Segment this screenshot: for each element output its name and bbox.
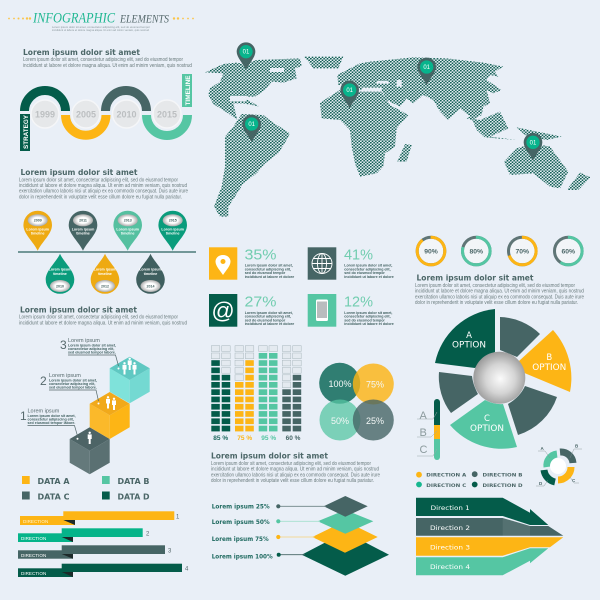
callout 2: sed eiusmod tempor labore. (49, 386, 97, 390)
map pin: australia: 01 (530, 140, 537, 146)
layer 100%: Lorem ipsum 100% (212, 552, 273, 560)
text block: pins intro: exercitation ullamco laboris nisi ut aliquip ex ea commodo consequat. Duis aute irure (19, 189, 188, 195)
pin 2013: 2013 (124, 218, 132, 222)
snake timeline (20, 74, 192, 151)
icon: at sign: @ (211, 298, 235, 324)
pin 2011 (69, 211, 97, 251)
stat tile 12% (308, 294, 394, 327)
stat tile 41%: sed do eiusmod tempor (344, 271, 385, 275)
pin 2013: timeline (121, 232, 134, 236)
legend: data: DATA A (38, 477, 70, 486)
venn circles (319, 363, 394, 440)
pin 2009 (23, 211, 52, 251)
donut 60%: 60% (561, 248, 575, 256)
ribbon bars (18, 511, 189, 577)
text block: pie intro: Lorem ipsum dolor sit amet (416, 274, 534, 282)
snake timeline: 2015 (157, 110, 177, 120)
map pin: australia (524, 133, 542, 161)
text block: layers intro: incididunt ut labore et dolore magna aliqua. Ut enim ad minim veniam, quis nostrud (211, 467, 379, 473)
text block: pins intro: incididunt ut labore et dolore magna aliqua. Ut enim ad minim veniam, quis nostrud (19, 183, 187, 189)
stat tile 12%: 12% (344, 294, 373, 311)
small segmented donut: B (575, 444, 579, 448)
legend: data: DATA D (118, 492, 150, 502)
venn circles: 100% (328, 379, 352, 389)
segment: C option: C (484, 414, 490, 424)
segment: A option (435, 309, 495, 368)
small segmented donut: A (540, 446, 544, 451)
cube 3 (110, 357, 150, 403)
pin 2015: 2015 (169, 218, 177, 222)
progress grid chart (211, 346, 301, 442)
drop 2012: timeline (98, 272, 112, 276)
callout 1: consectetur adipiscing elit, (28, 418, 74, 422)
icon: location pin (216, 255, 230, 275)
donut 70%: 70% (515, 248, 529, 256)
small segmented donut (536, 444, 582, 486)
stat tile 27%: 27% (244, 294, 276, 311)
callout 1: Lorem ipsum dolor sit amet, (28, 414, 76, 418)
segment: C option: OPTION (470, 424, 504, 434)
text block: layers intro: dolor in reprehenderit in voluptate velit esse cillum dolore eu fugiat nulla pariatur. (211, 478, 374, 484)
pin 2011: Lorem ipsum (72, 228, 94, 232)
drop 2010: 2010 (56, 284, 64, 288)
segment: B option: B (546, 353, 552, 363)
strip: timeline: TIMELINE (185, 76, 192, 106)
stat tile 41%: Lorem ipsum dolor sit amet, (344, 264, 392, 268)
ribbon 3 (18, 545, 172, 559)
drop 2012 (91, 254, 119, 294)
stat tile 12%: Lorem ipsum dolor sit amet, (344, 311, 392, 315)
venn circles: 50% (331, 416, 349, 426)
callout 2 (40, 373, 100, 404)
text block: pie intro: incididunt ut labore et dolore magna aliqua. Ut enim ad minim veniam, quis nostrud (415, 289, 584, 295)
text block: pins intro: dolor in reprehenderit in voluptate velit esse cillum dolore eu fugiat nulla pariatur. (19, 194, 182, 200)
text block: layers intro (211, 452, 380, 484)
text block: timeline intro (23, 48, 192, 69)
donut 80% (462, 237, 490, 265)
layer 50%: Lorem ipsum 50% (212, 518, 270, 526)
map pin: south america: 01 (248, 122, 256, 128)
pin 2011: 2011 (79, 218, 87, 222)
pin 2009: timeline (31, 232, 44, 236)
pin timeline (18, 211, 196, 294)
legend: directions (416, 471, 523, 489)
stat tile 41% (308, 246, 394, 280)
stat tile 27%: consectetur adipiscing elit, (245, 315, 291, 319)
callout 2: Lorem ipsum dolor sit amet, (49, 378, 97, 382)
strip: strategy: STRATEGY (23, 114, 30, 149)
donut 90% (417, 237, 445, 265)
ribbon 2 (18, 528, 150, 542)
stat tile 12%: sed do eiusmod tempor (344, 318, 385, 322)
abc scale bar: B (420, 427, 427, 439)
dotted world map (205, 42, 591, 217)
map pin: africa (340, 81, 359, 108)
title: INFOGRAPHIC (32, 10, 116, 26)
centre sphere (473, 352, 525, 404)
snake timeline: 2010 (116, 110, 137, 120)
stat tile 35%: Lorem ipsum dolor sit amet, (245, 264, 293, 268)
drop 2010 (46, 254, 74, 294)
stat tile 35%: incididunt ut labore et dolore (245, 275, 294, 279)
callout 3: consectetur adipiscing elit, (68, 347, 114, 351)
text block: pie intro: dolor in reprehenderit in voluptate velit esse cillum dolore eu fugiat nulla pariatur. (415, 300, 578, 306)
arrow: direction 1: Direction 1 (431, 505, 470, 512)
ribbon 1: 1 (176, 514, 180, 520)
callout 2: 2 (40, 374, 47, 388)
callout 3: Lorem ipsum (68, 338, 100, 344)
exploded pie chart (435, 309, 571, 449)
arrow: direction 2: Direction 2 (430, 525, 470, 532)
text block: pins intro: Lorem ipsum dolor sit amet (20, 168, 138, 177)
segment: C option (450, 400, 517, 449)
text block: cubes intro: Lorem ipsum dolor sit amet, consectetur adipiscing elit, sed do eiusmod tempor (19, 314, 178, 320)
title: incididunt ut labore et dolore magna aliqua. Ut enim ad minim veniam, quis nostrud (52, 28, 149, 32)
strip: timeline (182, 74, 192, 107)
pin 2013 (113, 211, 142, 251)
drop 2012: 2012 (101, 284, 109, 288)
pin 2015: Lorem ipsum (161, 228, 184, 232)
abc scale bar (417, 399, 440, 460)
callout 2: Lorem ipsum (49, 373, 81, 379)
donut 90%: 90% (424, 248, 438, 256)
ribbon 3: DIRECTION (21, 553, 46, 558)
column 85%: 85 % (213, 435, 228, 442)
stat tile 27%: Lorem ipsum dolor sit amet, (245, 311, 293, 315)
column 95%: 95 % (261, 435, 276, 442)
snake timeline: 1999 (35, 110, 55, 120)
text block: pins intro: Lorem ipsum dolor sit amet, consectetur adipiscing elit, sed do eiusmod tempor (19, 177, 178, 183)
layered diamonds chart (212, 496, 389, 576)
legend: directions: DIRECTION B (482, 472, 523, 478)
arrow: direction 1 (416, 498, 548, 525)
legend: data (22, 476, 150, 502)
callout 3: Lorem ipsum dolor sit amet, (68, 344, 116, 348)
layer 75% (212, 521, 378, 553)
text block: timeline intro: Lorem ipsum dolor sit amet, consectetur adipiscing elit, sed do eiusmod tempor (23, 57, 183, 63)
layer 75%: Lorem ipsum 75% (212, 535, 269, 543)
stat tile 35%: consectetur adipiscing elit, (245, 267, 291, 271)
callout 3: sed eiusmod tempor labore. (68, 350, 116, 354)
stat tile 41%: 41% (344, 246, 373, 264)
text block: pie intro (415, 274, 584, 306)
stat tile 35%: 35% (244, 246, 276, 264)
text block: cubes intro: Lorem ipsum dolor sit amet (20, 306, 137, 314)
text block: cubes intro: incididunt ut labore et dolore magna aliqua. Ut enim ad minim veniam, quis nostrud (19, 320, 187, 326)
callout 3: 3 (60, 338, 67, 352)
icon: globe (312, 254, 332, 274)
stat tile 27% (209, 294, 294, 327)
abc scale bar: A (420, 410, 428, 422)
map pin: north america: 01 (243, 50, 250, 56)
drop 2014 (136, 254, 165, 294)
segment: A option: A (466, 331, 472, 341)
title: Lorem ipsum dolor sit amet, consectetur adipiscing elit, sed do eiusmod tempor (52, 25, 150, 29)
arrow: direction 2 (416, 518, 563, 536)
text block: cubes intro (19, 306, 187, 326)
icon: smartphone (316, 300, 328, 321)
direction arrows (416, 498, 563, 575)
callout 1: Lorem ipsum (28, 408, 60, 414)
small segmented donut: D (539, 481, 543, 486)
snake timeline: 2005 (76, 110, 96, 120)
stat tile 27%: incididunt ut labore et dolore (245, 322, 294, 326)
map pin: north america (237, 42, 255, 70)
pin 2009: 2009 (34, 218, 42, 222)
abc scale bar: C (420, 444, 428, 456)
stat tile 41%: incididunt ut labore et dolore (344, 275, 394, 279)
venn circles: 75% (366, 380, 384, 390)
text block: pins intro (19, 168, 188, 200)
donut 70% (508, 237, 536, 265)
arrow: direction 3 (416, 537, 563, 556)
drop 2014: timeline (144, 272, 157, 276)
donut 80%: 80% (469, 248, 483, 256)
layer 25%: Lorem ipsum 25% (212, 502, 270, 510)
ribbon 2: DIRECTION (21, 536, 46, 541)
segment: A option: OPTION (452, 340, 486, 350)
segment: left (439, 372, 478, 413)
legend: directions: DIRECTION A (426, 472, 467, 478)
title: ELEMENTS (119, 14, 169, 26)
stat tile 12%: consectetur adipiscing elit, (344, 315, 391, 319)
column 75%: 75 % (237, 435, 252, 442)
text block: layers intro: Lorem ipsum dolor sit amet, consectetur adipiscing elit, sed do eiusmod tempor (211, 461, 371, 467)
stat tile 35% (209, 246, 294, 280)
callout 1: sed eiusmod tempor labore. (28, 421, 75, 425)
stat tile 41%: consectetur adipiscing elit, (344, 267, 391, 271)
drop 2014: Lorem ipsum (139, 268, 162, 272)
map pin: africa: 01 (346, 88, 354, 94)
layer 50% (212, 510, 373, 534)
drop 2010: timeline (53, 272, 67, 276)
ribbon 4: DIRECTION (21, 571, 46, 576)
layer 25% (212, 496, 368, 517)
drop 2012: Lorem ipsum (94, 268, 116, 272)
ribbon 3: 3 (168, 548, 172, 554)
donut 60% (554, 237, 582, 265)
arrow: direction 4 (416, 548, 548, 575)
ribbon 1: DIRECTION (23, 519, 48, 524)
ribbon 2: 2 (146, 532, 150, 538)
small segmented donut: C (572, 478, 576, 483)
title (8, 10, 194, 32)
callout 2: consectetur adipiscing elit, (49, 382, 95, 386)
callout 1 (20, 408, 78, 440)
text block: timeline intro: incididunt ut labore et dolore magna aliqua. Ut enim ad minim veniam, quis nostrud (23, 63, 192, 69)
isometric cube staircase (20, 338, 150, 474)
pin 2015: timeline (166, 232, 179, 236)
pin 2015 (158, 211, 187, 251)
cube 2 (90, 392, 130, 439)
text block: pie intro: Lorem ipsum dolor sit amet, consectetur adipiscing elit, sed do eiusmod tempor (415, 283, 575, 289)
segment: B option: OPTION (532, 363, 566, 373)
callout 1: 1 (20, 409, 27, 423)
layer 100% (212, 532, 389, 576)
cube 1 (70, 427, 110, 474)
stat tile 35%: sed do eiusmod tempor (245, 271, 286, 275)
pin 2013: Lorem ipsum (116, 228, 139, 232)
column 60%: 60 % (286, 435, 301, 442)
text block: timeline intro: Lorem ipsum dolor sit amet (23, 48, 140, 57)
legend: data: DATA C (38, 492, 70, 502)
map pin: asia (417, 58, 436, 85)
ribbon 1 (20, 511, 180, 525)
segment: top (500, 317, 540, 357)
text block: layers intro: Lorem ipsum dolor sit amet (211, 452, 328, 460)
strip: strategy (20, 114, 30, 151)
stat tile 27%: sed do eiusmod tempor (245, 318, 286, 322)
legend: directions: DIRECTION D (482, 483, 523, 489)
segment: B option (519, 330, 571, 392)
drop 2014: 2014 (146, 284, 154, 288)
pin 2011: timeline (76, 232, 90, 236)
stat tile 12%: incididunt ut labore et dolore (344, 322, 394, 326)
legend: directions: DIRECTION C (426, 483, 467, 489)
map pin: asia: 01 (423, 65, 431, 71)
ribbon 4: 4 (185, 566, 189, 572)
text block: pie intro: exercitation ullamco laboris nisi ut aliquip ex ea commodo consequat. Duis aute irure (415, 294, 584, 300)
legend: data: DATA B (118, 477, 150, 486)
segment: lower right (508, 386, 557, 435)
map pin: south america (242, 115, 261, 142)
text block: layers intro: exercitation ullamco laboris nisi ut aliquip ex ea commodo consequat. Duis aute irure (211, 472, 380, 478)
arrow: direction 3: Direction 3 (430, 544, 470, 552)
pin 2009: Lorem ipsum (26, 228, 49, 232)
arrow: direction 4: Direction 4 (430, 564, 470, 571)
ribbon 4 (18, 564, 189, 577)
drop 2010: Lorem ipsum (49, 268, 71, 272)
venn circles: 25% (366, 416, 384, 426)
callout 3 (60, 338, 120, 370)
